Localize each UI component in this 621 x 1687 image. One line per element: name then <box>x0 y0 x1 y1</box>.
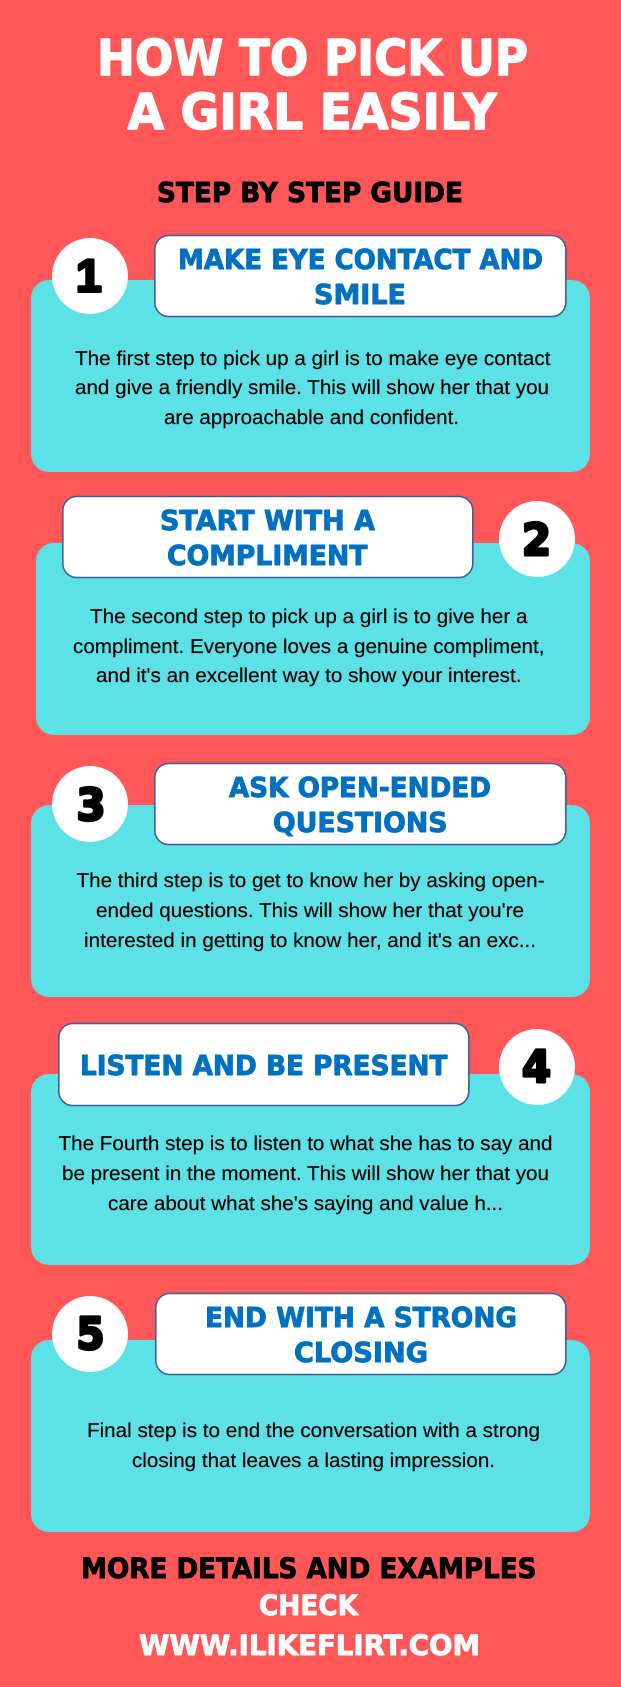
icon: number 3 badge <box>52 766 128 842</box>
text block: step 4 description <box>58 1133 552 1215</box>
text block: step 1 description <box>75 348 551 429</box>
text block: step 1 description: are approachable and confident. <box>164 407 459 429</box>
heading: step 1: MAKE EYE CONTACT AND <box>178 244 543 276</box>
icon: number 5 badge <box>52 1296 128 1372</box>
heading: step 4: LISTEN AND BE PRESENT <box>80 1050 448 1082</box>
text block: step 3 description <box>76 870 544 952</box>
text block: step 2 description: The second step to pick up a girl is to give her a <box>90 606 528 628</box>
heading: step 3: QUESTIONS <box>273 807 448 839</box>
text block: step 5 description: Final step is to end the conversation with a strong <box>87 1420 540 1442</box>
text block: step 5 description: closing that leaves a lasting impression. <box>132 1450 495 1472</box>
panel: step 1 <box>31 236 590 472</box>
icon: number 4 badge <box>499 1029 575 1105</box>
text block: step 1 description: The first step to pick up a girl is to make eye contact <box>75 348 551 370</box>
text block: step 4 description: The Fourth step is to listen to what she has to say and <box>58 1133 552 1155</box>
footer call to action: WWW.ILIKEFLIRT.COM <box>139 1629 480 1662</box>
heading: step 5 <box>156 1294 566 1374</box>
icon: number 4 badge: 4 <box>522 1042 551 1093</box>
text block: step 2 description <box>73 606 544 687</box>
subtitle: STEP BY STEP GUIDE <box>157 177 463 209</box>
heading: step 3 <box>155 764 566 844</box>
heading: step 5: END WITH A STRONG <box>205 1302 517 1334</box>
footer call to action <box>81 1552 536 1662</box>
text block: step 1 description: and give a friendly smile. This will show her that you <box>75 377 549 399</box>
icon: number 2 badge <box>499 501 575 577</box>
heading: step 4 <box>59 1024 469 1106</box>
icon: number 3 badge: 3 <box>76 780 106 831</box>
text block: step 3 description: ended questions. This will show her that you're <box>96 900 524 922</box>
footer call to action: MORE DETAILS AND EXAMPLES <box>81 1552 536 1585</box>
title: A GIRL EASILY <box>128 83 498 141</box>
icon: number 1 badge <box>52 238 128 314</box>
text block: step 2 description: compliment. Everyone loves a genuine compliment, <box>73 636 544 658</box>
panel: step 4 <box>31 1024 590 1265</box>
heading: step 2: START WITH A <box>160 505 376 537</box>
heading: step 2: COMPLIMENT <box>167 540 368 572</box>
icon: number 5 badge: 5 <box>76 1309 104 1360</box>
text block: step 2 description: and it's an excellent way to show your interest. <box>96 665 522 687</box>
text block: step 5 description <box>87 1420 540 1472</box>
icon: number 2 badge: 2 <box>522 515 551 566</box>
panel: step 5 <box>31 1294 590 1532</box>
panel: step 2 <box>36 496 590 735</box>
heading: step 1 <box>155 236 566 316</box>
title: HOW TO PICK UP <box>97 29 528 87</box>
text block: step 4 description: be present in the moment. This will show her that you <box>62 1163 549 1185</box>
heading: step 1: SMILE <box>314 279 406 311</box>
text block: step 3 description: interested in getting to know her, and it's an exc... <box>84 930 536 952</box>
heading: step 3: ASK OPEN-ENDED <box>229 772 491 804</box>
heading: step 2 <box>63 496 473 578</box>
heading: step 5: CLOSING <box>294 1337 428 1369</box>
title <box>97 29 528 141</box>
text block: step 3 description: The third step is to get to know her by asking open- <box>76 870 544 892</box>
icon: number 1 badge: 1 <box>76 250 102 302</box>
footer call to action: CHECK <box>259 1589 359 1622</box>
text block: step 4 description: care about what she's saying and value h... <box>108 1193 503 1215</box>
panel: step 3 <box>31 764 590 997</box>
